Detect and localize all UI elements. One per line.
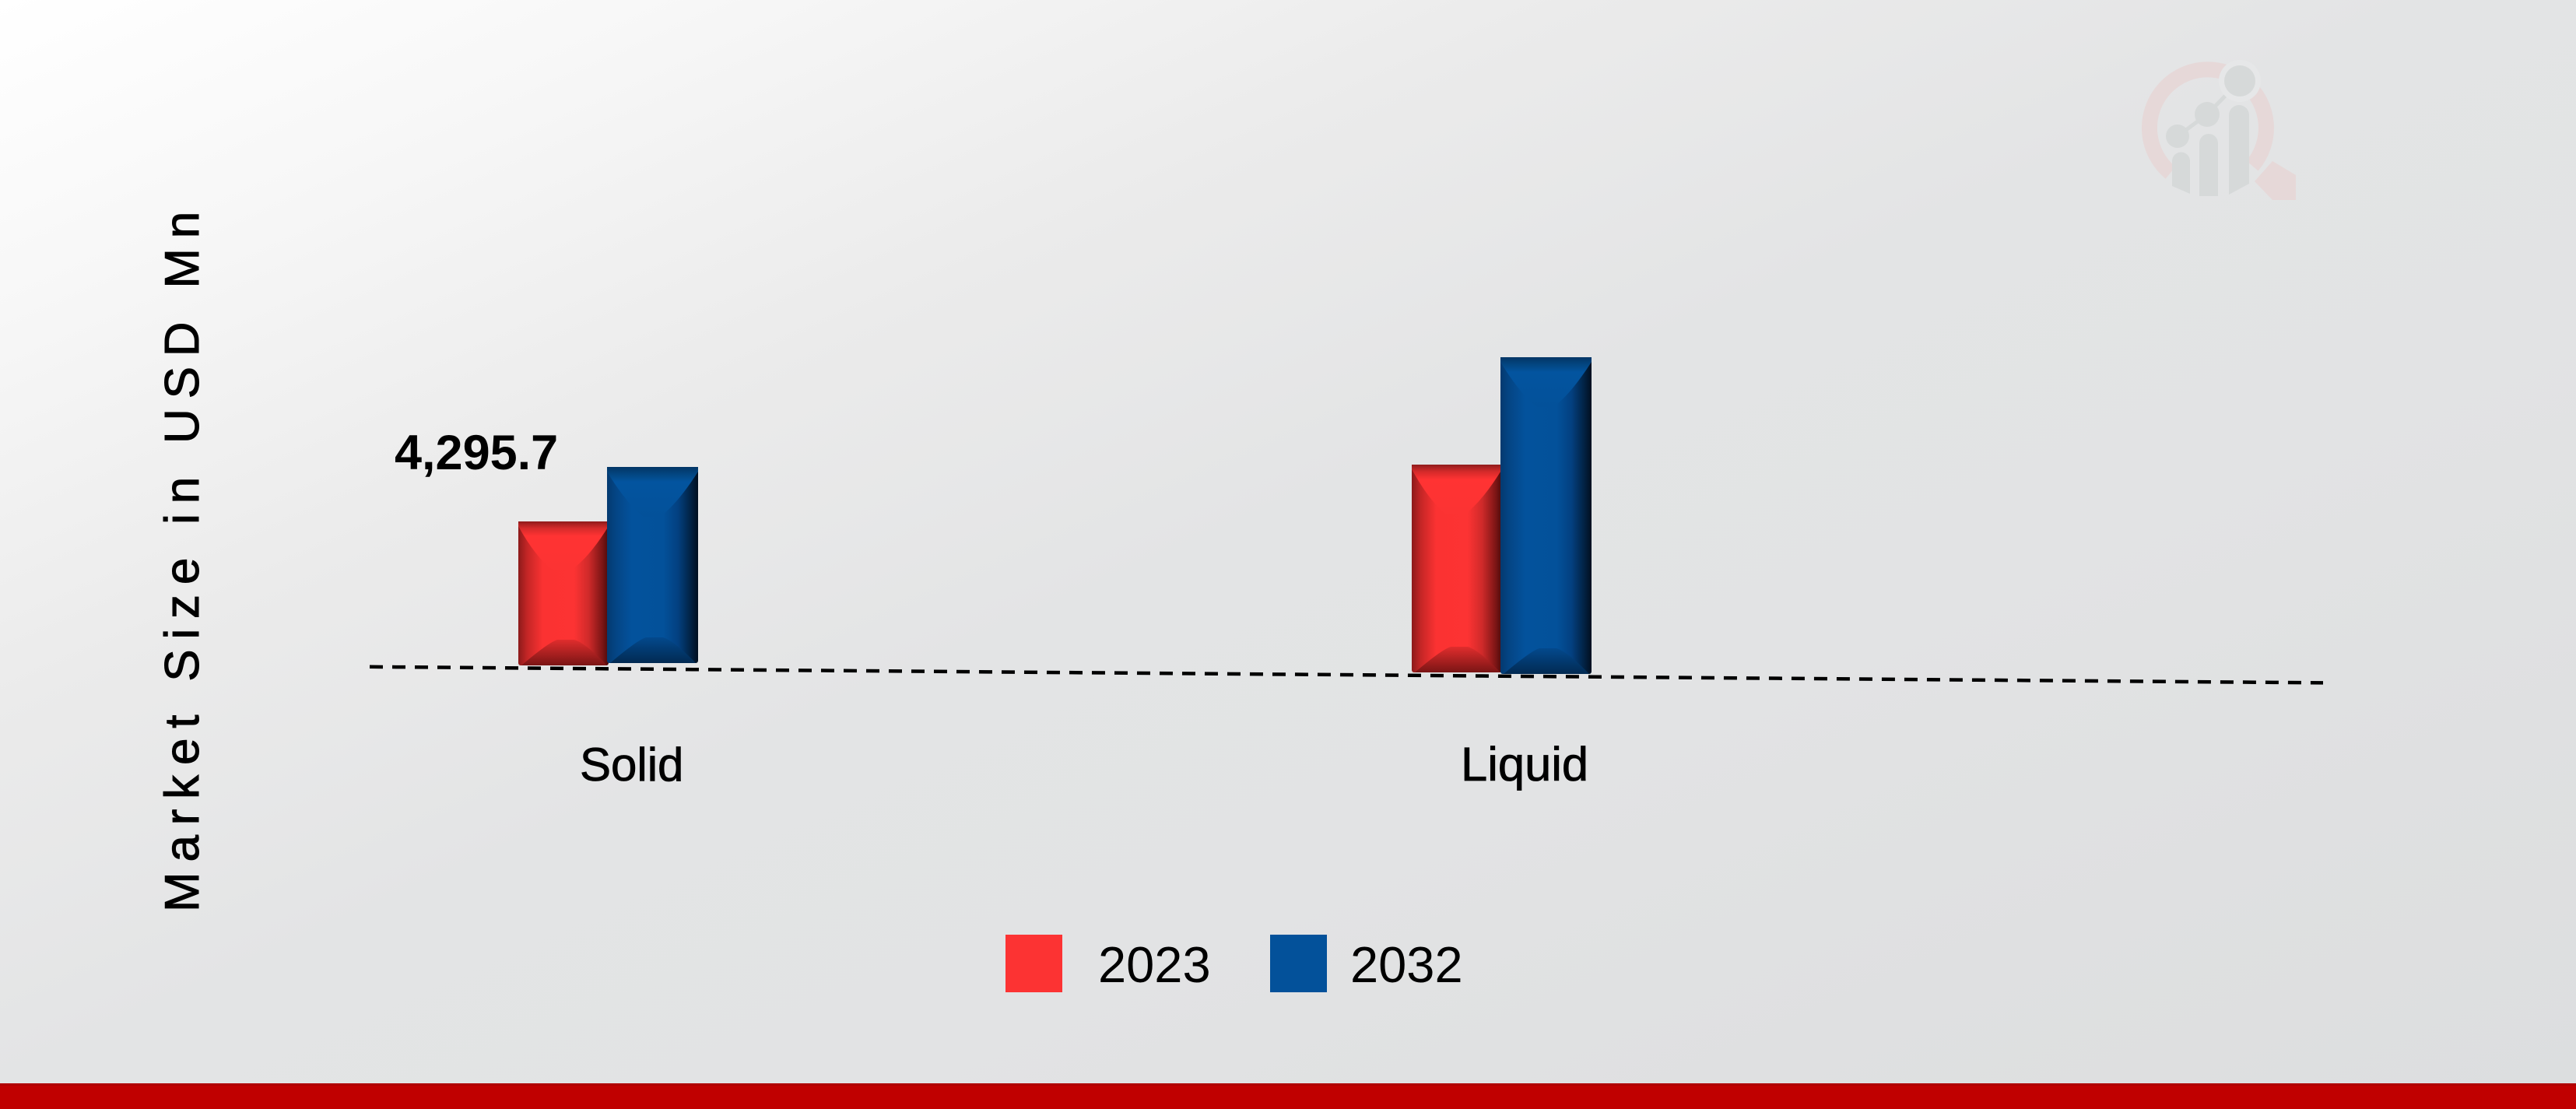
legend label 2032: 2032	[1350, 936, 1463, 993]
bar: Solid 2032	[607, 467, 698, 663]
bar group: Liquid	[1412, 357, 1592, 674]
bar group: Solid	[518, 467, 698, 665]
watermark logo	[2150, 60, 2296, 200]
bar: Solid 2023	[518, 521, 609, 665]
legend	[1005, 935, 1463, 993]
data label: 4,295.7: 4,295.7	[395, 426, 558, 480]
category label: Liquid: Liquid	[1461, 738, 1588, 791]
bar: Liquid 2032	[1500, 357, 1592, 674]
legend label 2023: 2023	[1098, 936, 1211, 993]
category label: Solid: Solid	[580, 739, 683, 791]
dashed baseline	[370, 667, 2323, 683]
legend swatch 2032	[1270, 935, 1327, 992]
y axis title: Market Size in USD Mn	[156, 202, 209, 912]
footer bar	[0, 1083, 2576, 1109]
logo trend line	[2178, 81, 2240, 136]
logo handle	[2255, 161, 2296, 200]
legend swatch 2023	[1005, 935, 1062, 992]
bar: Liquid 2023	[1412, 465, 1502, 672]
logo ring	[2150, 69, 2266, 173]
logo bars and dots	[2166, 60, 2261, 196]
